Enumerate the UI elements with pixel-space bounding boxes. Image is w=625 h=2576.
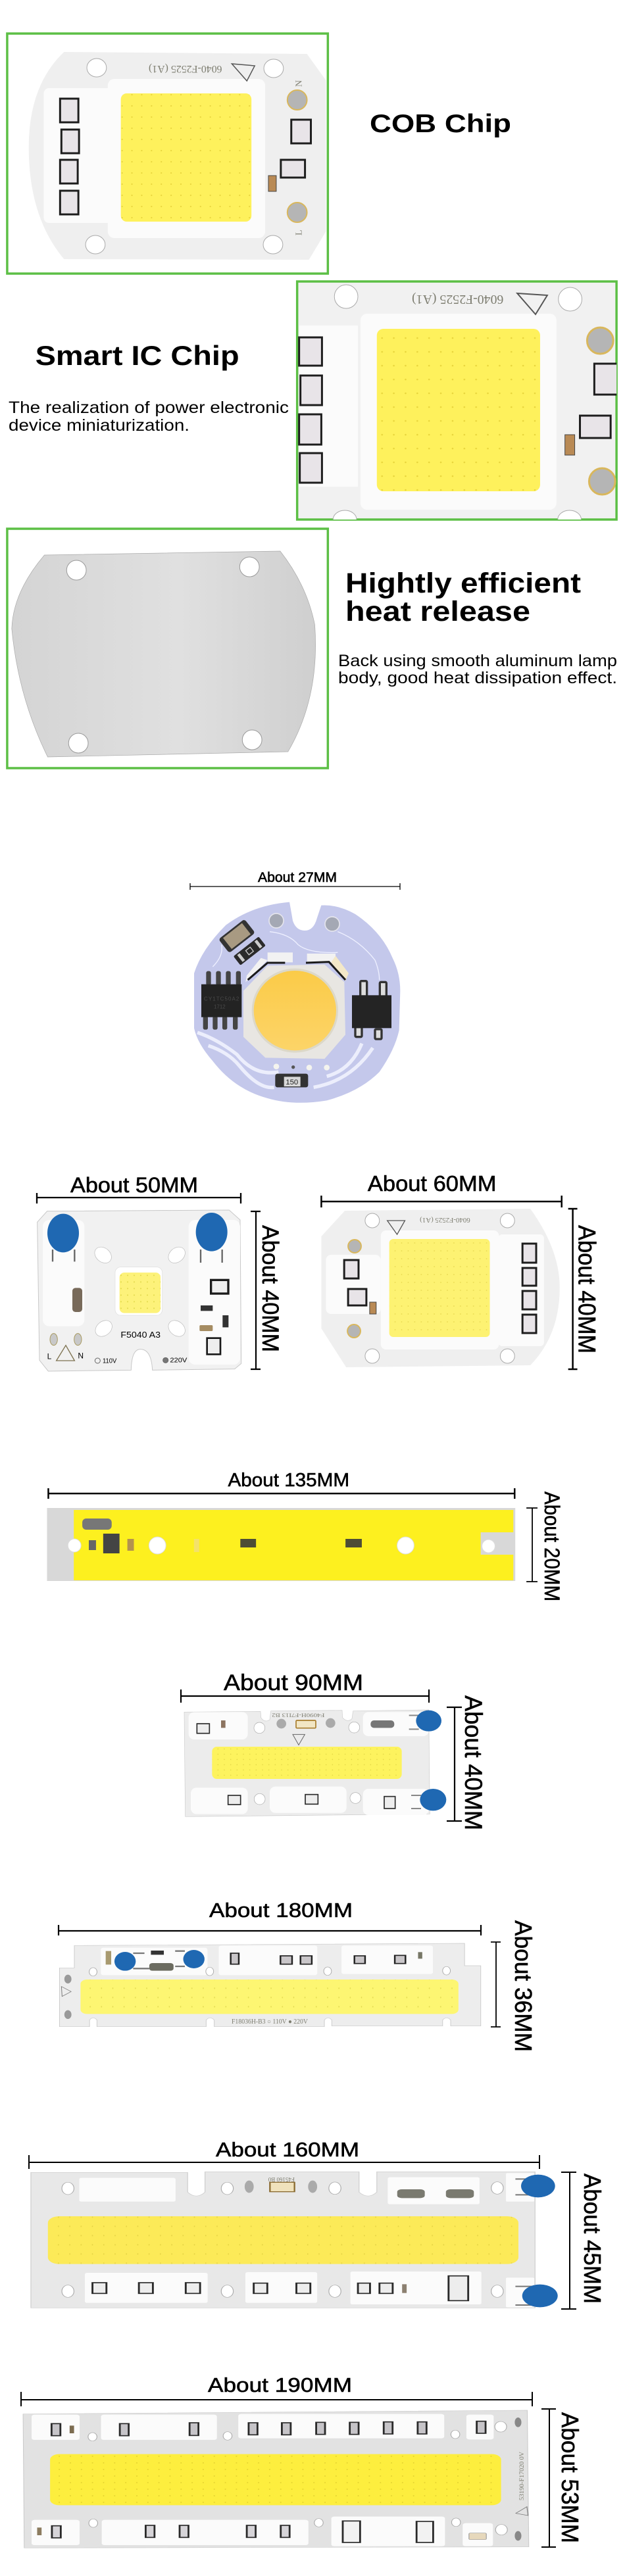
dimension: 135MM width (48, 1470, 514, 1499)
yellow LED array (120, 1273, 161, 1313)
yellow LED bar (50, 2454, 501, 2505)
dimension: 50MM module height: About 40MM (257, 1225, 283, 1352)
pad regions (189, 1712, 429, 1815)
markings: 110V (103, 1357, 117, 1365)
dimension: 27MM (190, 870, 400, 890)
text: heat release description (338, 652, 617, 687)
lower bright traces (197, 1033, 373, 1088)
blue varistors (47, 1213, 228, 1263)
round COB module (194, 902, 400, 1103)
dimension: 60MM width: About 60MM (368, 1171, 496, 1196)
190MM module (23, 2410, 529, 2548)
markings (47, 1330, 188, 1365)
board marking: 6040-F2525 (A1) (149, 63, 222, 74)
metal patches (245, 952, 349, 982)
dimension: 90MM width: About 90MM (224, 1670, 363, 1695)
board outline (29, 52, 326, 260)
solder pads (269, 913, 339, 931)
dimension: 160MM width (29, 2138, 539, 2169)
right components (268, 90, 311, 222)
panel: COB chip photo (7, 34, 328, 274)
holes (365, 1213, 514, 1363)
pads (93, 2276, 468, 2300)
dimension: 160MM module height (561, 2172, 606, 2309)
blue varistors (515, 2175, 558, 2307)
heading: Smart IC Chip: Smart IC Chip (36, 340, 239, 371)
90MM module (184, 1710, 446, 1816)
text: heat release description: body, good heat dissipation effect. (338, 669, 617, 687)
warning triangle (293, 1734, 305, 1745)
dimension: 190MM width: About 190MM (208, 2373, 352, 2396)
board marking: F4090H-F7I13 B2 (272, 1713, 324, 1718)
markings: F5040 A3 (120, 1330, 161, 1340)
dimension: 180MM module height: About 36MM (510, 1920, 537, 2052)
blue varistors (114, 1950, 205, 1971)
emitter ring (252, 969, 338, 1053)
holes (62, 2182, 503, 2297)
capacitor (218, 919, 255, 953)
bottom contacts (274, 1063, 330, 1071)
left driver IC (201, 971, 241, 1030)
board marking: 190MM: 53190-F17020 0V (518, 2451, 525, 2500)
white pad regions (43, 1220, 240, 1365)
dimension: 160MM width: About 160MM (216, 2138, 359, 2161)
135MM strip module (47, 1508, 515, 1581)
enlarged board details: 6040-F2525 (A1) (412, 292, 503, 306)
plate holes (66, 557, 262, 753)
holes (91, 1244, 188, 1340)
panel: aluminum back photo (7, 529, 328, 768)
160MM module (31, 2172, 558, 2308)
holes (254, 1722, 361, 1805)
components (245, 2181, 474, 2293)
chip collar (115, 1267, 162, 1315)
dimension: 60MM module height: About 40MM (574, 1225, 600, 1353)
dimension: 190MM width (21, 2373, 532, 2406)
heading: heat release: heat release (345, 596, 530, 627)
dimension: 180MM width (59, 1899, 481, 1935)
dimension: 90MM width (181, 1670, 429, 1703)
left driver IC: CY1TC50A2 (204, 996, 239, 1002)
board marking: 6040-F2525 (A1) (420, 1216, 470, 1224)
pad regions (32, 2414, 493, 2546)
pad regions (326, 1230, 544, 1349)
pads (231, 1953, 405, 1964)
dimension: 180MM width: About 180MM (209, 1899, 353, 1922)
dimension: 50MM module height (251, 1211, 283, 1369)
yellow LED bar (212, 1747, 402, 1779)
yellow LED bar (80, 1980, 459, 2014)
heading: heat release: Hightly efficient (345, 568, 581, 599)
components (72, 1280, 228, 1354)
right IC (352, 981, 391, 1039)
L label: L (295, 230, 305, 235)
voltage markers (95, 1357, 168, 1363)
dimension: 135MM width: About 135MM (228, 1470, 349, 1491)
solder and resistor (347, 1240, 376, 1338)
IC pads (344, 1244, 536, 1333)
dimension: 90MM module height (447, 1695, 487, 1830)
mounting holes (86, 59, 284, 254)
yellow LED strip (74, 1510, 513, 1580)
dimension: 50MM width (37, 1173, 241, 1203)
pad regions (79, 2173, 534, 2307)
top pads (51, 2421, 486, 2436)
dimension: 60MM width (321, 1171, 562, 1207)
enlarged board details (299, 285, 618, 529)
markings: N (78, 1351, 84, 1361)
60MM module (321, 1209, 560, 1367)
panel: smart IC chip photo (297, 281, 618, 529)
dimension: 180MM module height (491, 1920, 537, 2052)
warning triangle (232, 64, 255, 81)
holes (88, 2421, 507, 2535)
copper traces (213, 932, 380, 980)
holes (89, 1966, 451, 1976)
resistor 150: 150 (286, 1079, 298, 1086)
dimension: 135MM module height: About 20MM (540, 1492, 564, 1601)
board marking: 180MM: F18036H-B3 ○ 110V ● 220V (232, 2018, 309, 2026)
resistor (234, 936, 266, 965)
warning triangle (388, 1221, 405, 1234)
50MM module (38, 1210, 241, 1371)
components (106, 1951, 422, 1971)
heading: heat release (345, 568, 581, 627)
solder points (50, 1334, 82, 1346)
yellow LED array (389, 1239, 490, 1337)
resistor 150 (275, 1074, 308, 1087)
collar dark edge (248, 962, 345, 980)
solder and triangle (61, 1975, 72, 2019)
left IC pads (60, 99, 79, 214)
dimension: 27MM: About 27MM (258, 870, 337, 885)
dimension: 135MM module height (526, 1492, 564, 1601)
pad regions (101, 1945, 433, 1975)
text: heat release description: Back using smooth aluminum lamp (338, 652, 617, 670)
dimension: 160MM module height: About 45MM (579, 2174, 606, 2304)
holes (68, 1537, 495, 1554)
text: IC chip description: device miniaturization. (9, 416, 189, 435)
yellow LED bar (48, 2216, 518, 2264)
components (221, 1718, 394, 1728)
aluminum plate (12, 551, 316, 757)
markings: 220V (170, 1357, 188, 1365)
heading: COB Chip: COB Chip (370, 110, 511, 138)
board marking: 160MM: F45160 B0 (268, 2176, 295, 2183)
dimension: 190MM module height: About 53MM (557, 2412, 584, 2543)
components (82, 1519, 362, 1553)
text: IC chip description: The realization of power electronic (9, 399, 289, 417)
left driver IC: 1712 (214, 1004, 226, 1009)
blue varistors (409, 1711, 446, 1810)
180MM module (59, 1943, 481, 2027)
yellow emitter (254, 971, 336, 1050)
dimension: 90MM module height: About 40MM (460, 1695, 487, 1830)
markings: L (47, 1352, 52, 1361)
small components (37, 2418, 528, 2540)
dimension: 50MM width: About 50MM (70, 1173, 198, 1197)
raised pads (44, 79, 265, 238)
COB emitter collar (243, 965, 345, 1059)
bottom pads (52, 2521, 433, 2542)
pads (197, 1724, 395, 1809)
dimension: 190MM module height (541, 2409, 584, 2547)
text: IC chip description (9, 399, 289, 435)
warning triangle (57, 1346, 74, 1361)
N label: N (295, 80, 305, 87)
yellow LED array (121, 93, 251, 222)
